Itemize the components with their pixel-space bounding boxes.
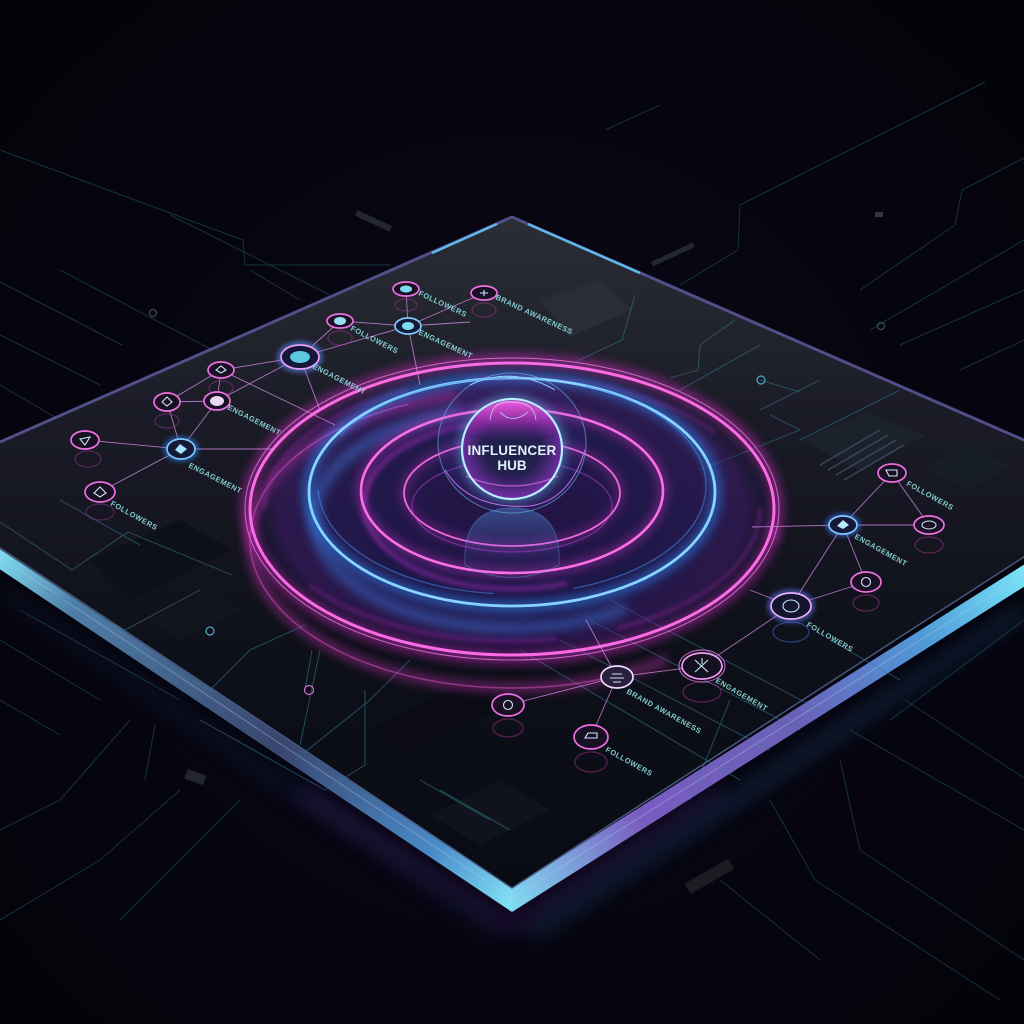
node: followers 4: FOLLOWERS [417, 289, 468, 319]
node reflections [75, 299, 496, 520]
node: engagement 2: ENGAGEMENT [226, 403, 283, 437]
node: brand awareness 2: BRAND AWARENESS [625, 687, 703, 736]
sphere reflection [465, 508, 559, 578]
outer bubble [438, 373, 586, 513]
sphere rim [462, 399, 562, 499]
node: brand awareness 1: BRAND AWARENESS [494, 293, 574, 336]
node: engagement hub 3 [277, 341, 368, 396]
plate top edges [0, 217, 1024, 442]
icon: influencer hub sphere [438, 373, 586, 513]
network: left connectors [85, 289, 484, 492]
node: brand awareness 2 [601, 666, 703, 736]
node: followers 4 [393, 282, 468, 319]
node: pink 4 [208, 362, 234, 378]
blue echo ring [314, 408, 710, 628]
node: followers 2: FOLLOWERS [109, 499, 159, 532]
node: pink 6 [914, 516, 944, 534]
plate panels [90, 280, 1010, 845]
node: pink 7 [851, 572, 881, 592]
node cluster: right [492, 464, 955, 778]
lower echo pink ring [250, 392, 774, 688]
node: followers 2 [85, 482, 159, 532]
node: followers 3: FOLLOWERS [349, 324, 400, 356]
node: pink 3 [154, 393, 180, 411]
node: followers 5 [878, 464, 955, 512]
chart: concentric rings [245, 358, 779, 688]
blue ring [308, 377, 716, 607]
node: engagement hub 3: ENGAGEMENT [311, 362, 368, 396]
hub label: INFLUENCER [468, 443, 557, 458]
inner pink ring [404, 440, 620, 552]
panel: glass plate [0, 217, 1024, 912]
node: engagement 6 [679, 650, 769, 713]
plate circuit traces [0, 295, 904, 830]
node: followers 7 [574, 725, 654, 778]
glow of top edge highlight [432, 224, 640, 273]
node: engagement 2 [204, 392, 283, 437]
node: followers 3 [327, 314, 400, 356]
sphere glow [458, 395, 566, 503]
network: right connectors [508, 473, 929, 737]
node: engagement hub 1 [163, 436, 244, 495]
node: followers 6: FOLLOWERS [805, 620, 855, 654]
third pink ring [361, 409, 663, 589]
outer pink ring [245, 358, 779, 660]
node cluster: left [71, 282, 574, 532]
plate thickness edge [0, 536, 1024, 912]
node: followers 7: FOLLOWERS [604, 745, 654, 778]
node: brand awareness 1 [471, 286, 574, 336]
floor glow under plate [0, 590, 1024, 935]
node: engagement 4 [395, 318, 474, 361]
node: engagement hub 1: ENGAGEMENT [187, 461, 244, 495]
node: followers 1 [71, 431, 99, 449]
node: pink 8 [492, 694, 524, 716]
node: engagement 4: ENGAGEMENT [417, 328, 474, 361]
sphere body [462, 399, 562, 499]
node: engagement 5 [825, 513, 909, 568]
node: followers 6 [767, 589, 855, 654]
node reflections [493, 537, 943, 772]
node: engagement 6: ENGAGEMENT [714, 676, 769, 713]
node: engagement 5: ENGAGEMENT [853, 532, 909, 568]
plate surface [0, 217, 1024, 888]
node: followers 5: FOLLOWERS [905, 479, 955, 512]
icon: influencer hub sphere: HUB [497, 458, 527, 473]
ring floor glow [254, 366, 770, 658]
